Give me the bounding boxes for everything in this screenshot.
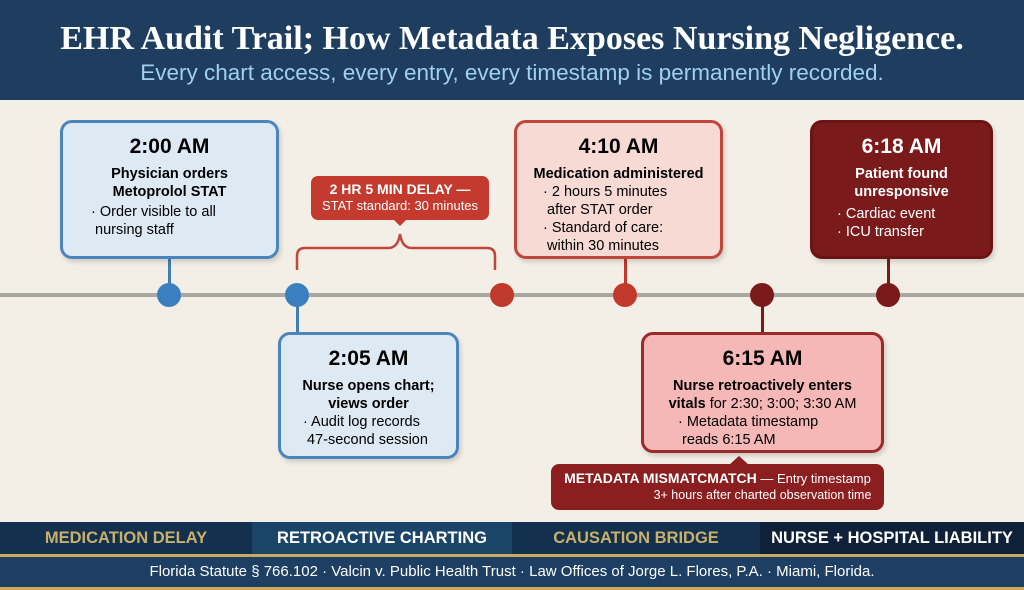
event 2:00 AM: 2:00 AM: [130, 135, 209, 158]
event 6:15 AM: reads 6:15 AM: [682, 432, 776, 448]
metadata mismatch callout: 3+ hours after charted observation time: [654, 488, 871, 502]
event 6:15 AM: vitals for 2:30; 3:00; 3:30 AM: [669, 396, 856, 412]
event 6:18 AM: 6:18 AM: [862, 135, 941, 158]
event 2:00 AM: [60, 120, 279, 259]
footer: [0, 557, 1024, 587]
event 6:18 AM: unresponsive: [854, 184, 949, 200]
metadata mismatch callout: [551, 464, 884, 510]
event 6:18 AM: [810, 120, 993, 259]
category bar: RETROACTIVE CHARTING: [277, 529, 487, 547]
event 4:10 AM: within 30 minutes: [547, 238, 659, 254]
event 2:00 AM: Physician orders: [111, 166, 228, 182]
event 2:05 AM: views order: [328, 396, 409, 412]
event 2:00 AM: · Order visible to all: [91, 204, 216, 220]
stems: [168, 258, 171, 295]
event 2:05 AM: Nurse opens chart;: [302, 378, 435, 394]
event 2:05 AM: [278, 332, 459, 459]
event 4:10 AM: after STAT order: [547, 202, 653, 218]
event 2:05 AM: 2:05 AM: [329, 347, 408, 370]
event 6:18 AM: · Cardiac event: [837, 206, 935, 222]
event 2:00 AM: Metoprolol STAT: [113, 184, 226, 200]
event 2:05 AM: 47-second session: [307, 432, 428, 448]
bracket: [296, 220, 496, 270]
event 6:15 AM: Nurse retroactively enters: [673, 378, 852, 394]
event 4:10 AM: · 2 hours 5 minutes: [543, 184, 667, 200]
metadata mismatch callout: METADATA MISMATCMATCH — Entry timestamp: [564, 470, 871, 486]
title: EHR Audit Trail; How Metadata Exposes Nursing Negligence.: [60, 20, 964, 57]
event 6:18 AM: Patient found: [855, 166, 948, 182]
event 4:10 AM: · Standard of care:: [543, 220, 663, 236]
event 6:18 AM: · ICU transfer: [837, 224, 924, 240]
event 4:10 AM: 4:10 AM: [579, 135, 658, 158]
dots: [157, 283, 181, 307]
footer: Florida Statute § 766.102 · Valcin v. Public Health Trust · Law Offices of Jorge L. Flores, P.A. · Miami, Florida.: [149, 563, 875, 580]
category bar: CAUSATION BRIDGE: [553, 529, 719, 547]
event 6:15 AM: [641, 332, 884, 453]
event 2:00 AM: nursing staff: [95, 222, 174, 238]
delay callout: [311, 176, 489, 220]
category bar: [0, 522, 1024, 554]
header: [0, 0, 1024, 100]
event 6:15 AM: · Metadata timestamp: [678, 414, 818, 430]
timeline line: [0, 293, 1024, 297]
subtitle: Every chart access, every entry, every timestamp is permanently recorded.: [140, 60, 884, 85]
event 4:10 AM: Medication administered: [533, 166, 704, 182]
event 6:15 AM: 6:15 AM: [723, 347, 802, 370]
category bar: NURSE + HOSPITAL LIABILITY: [771, 529, 1013, 547]
delay callout: STAT standard: 30 minutes: [322, 198, 478, 213]
event 2:05 AM: · Audit log records: [303, 414, 420, 430]
delay callout: 2 HR 5 MIN DELAY —: [330, 181, 470, 197]
event 4:10 AM: [514, 120, 723, 259]
category bar: MEDICATION DELAY: [45, 529, 207, 547]
